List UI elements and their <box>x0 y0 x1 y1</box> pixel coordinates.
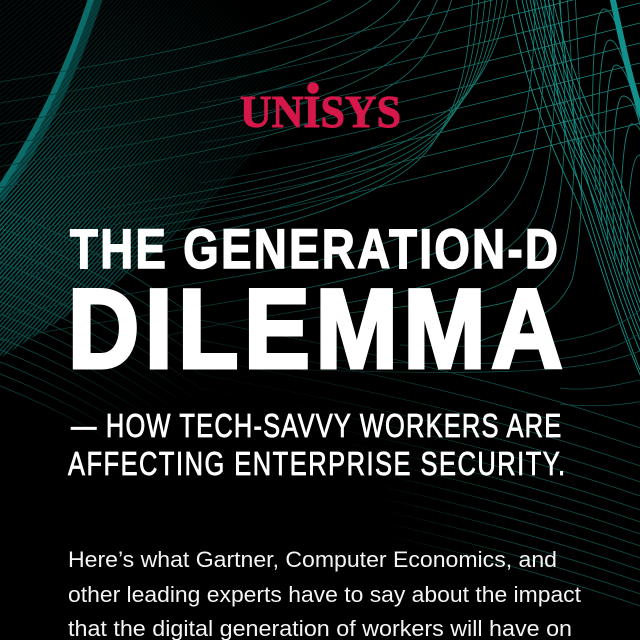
intro text block: other leading experts have to say about the impact <box>68 582 581 607</box>
title line one: THE GENERATION-D <box>70 218 558 280</box>
subtitle line one: — HOW TECH-SAVVY WORKERS ARE <box>71 408 561 445</box>
converging bright fan <box>512 0 640 384</box>
logo: Unisys: UNISYS <box>240 86 401 137</box>
subtitle <box>68 408 565 483</box>
bright left arc <box>0 0 97 198</box>
subtitle line two: AFFECTING ENTERPRISE SECURITY. <box>68 446 565 483</box>
title line two: DILEMMA <box>68 268 563 392</box>
crossing flat lines, top right <box>200 0 640 223</box>
sweeping contour lines <box>0 0 582 345</box>
intro text block <box>68 547 581 640</box>
dense hatched wave field <box>0 0 276 358</box>
bright upper-right band <box>612 0 640 125</box>
lower contour lines <box>0 200 640 613</box>
intro text block: Here’s what Gartner, Computer Economics, and <box>68 547 557 572</box>
nested arches, upper right <box>593 9 640 290</box>
hatch region left of the arc <box>0 0 92 190</box>
title <box>68 218 563 392</box>
